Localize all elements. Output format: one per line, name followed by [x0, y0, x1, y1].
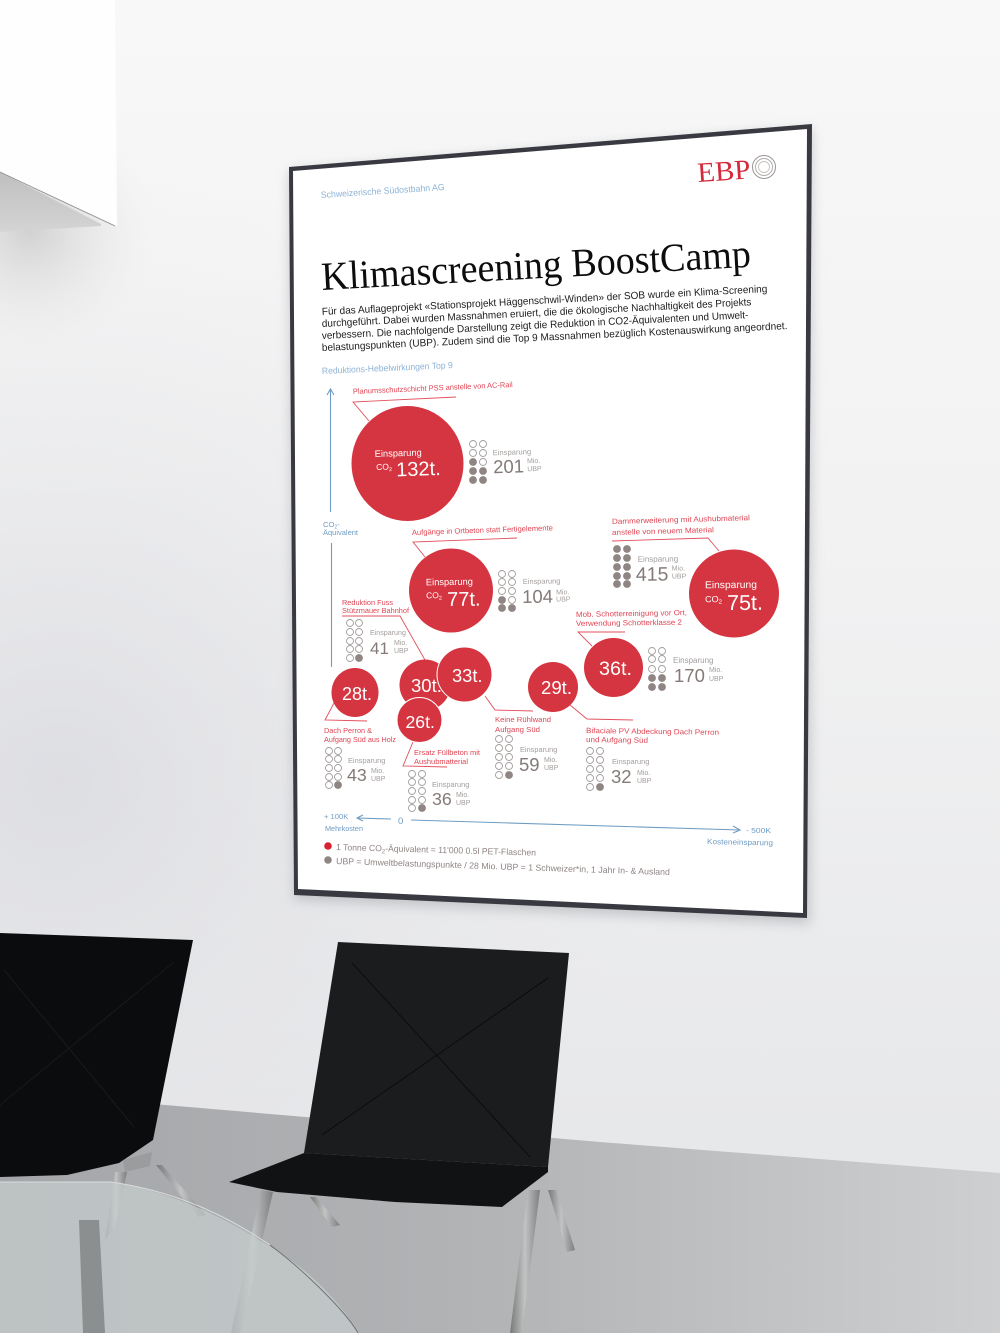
item: 29t circle: 29t. — [541, 677, 572, 698]
x axis: Kosten — [324, 812, 773, 847]
intro text: belastungspunkten (UBP). Zudem sind die Top 9 Massnahmen bezüglich Kostenauswirkung angeordnet. — [322, 321, 788, 354]
item: Bifaciale PV 32 Mio UBP: 32 — [611, 766, 632, 787]
item: Dach Perron 28t: 43 — [347, 765, 367, 785]
item: Dach Perron 28t: Dach Perron & — [324, 726, 372, 735]
item: Dammerweiterung 75t: Einsparung — [638, 554, 678, 564]
chart heading: Reduktions-Hebelwirkungen Top 9 — [322, 360, 453, 376]
room: overhead wall block — [0, 0, 117, 232]
item: Mob. Schotterreinigung 36t: Verwendung Schotterklasse 2 — [576, 618, 682, 628]
item: Dach Perron 28t: 28t. — [342, 684, 372, 704]
item: Keine Rühlwand 33t: Mio. — [544, 757, 557, 764]
x axis: Kosten: - 500K — [746, 826, 771, 835]
item: Planumsschutzschicht 132t: Einsparung — [375, 447, 422, 459]
intro text: verbessern. Die nachfolgende Darstellung zeigt die Reduktion in CO2-Äquivalenten und Umwelt- — [322, 309, 749, 342]
table: glass top and leg — [0, 1182, 358, 1333]
item: Keine Rühlwand 33t: Einsparung — [520, 745, 557, 754]
item: Dammerweiterung 75t: UBP — [672, 573, 687, 581]
item: Planumsschutzschicht 132t: UBP — [527, 466, 542, 473]
item: Mob. Schotterreinigung 36t: Mio. — [709, 667, 722, 674]
item: Ersatz Füllbeton 26t: 26t. — [406, 712, 435, 732]
item: Aufgänge in Ortbeton 77t: Einsparung — [523, 576, 560, 586]
item: Aufgänge in Ortbeton 77t — [409, 523, 571, 632]
item: Planumsschutzschicht 132t: CO — [376, 462, 389, 472]
item: Keine Rühlwand 33t: 59 — [519, 754, 540, 775]
item: Mob. Schotterreinigung 36t: 170 — [674, 665, 705, 686]
item: Reduktion Fuss Stützmauer 30t: 30t. — [411, 675, 442, 696]
item: Aufgänge in Ortbeton 77t: UBP — [556, 596, 571, 604]
item: Keine Rühlwand 33t — [437, 647, 559, 779]
item: Bifaciale PV 32 Mio UBP: Einsparung — [612, 757, 649, 766]
logo: EBP: EBP — [696, 155, 751, 189]
legend — [324, 842, 670, 877]
item: Reduktion Fuss Stützmauer 30t: Reduktion Fuss — [342, 598, 393, 607]
poster panel — [293, 129, 807, 913]
legend: 2 — [382, 849, 386, 855]
item: Bifaciale PV 32 Mio UBP: Bifaciale PV Abdeckung Dach Perron — [586, 726, 719, 737]
item: Planumsschutzschicht 132t — [352, 380, 542, 521]
y axis: CO2-Äquivalent: Äquivalent — [323, 528, 359, 537]
item: Reduktion Fuss Stützmauer 30t: UBP — [394, 648, 409, 655]
item: Reduktion Fuss Stützmauer 30t: Mio. — [394, 640, 407, 647]
item: Planumsschutzschicht 132t: Einsparung — [493, 447, 531, 457]
item: Ersatz Füllbeton 26t — [397, 698, 481, 812]
item: Keine Rühlwand 33t: Aufgang Süd — [495, 725, 540, 734]
item: Reduktion Fuss Stützmauer 30t: Stützmauer Bahnhof — [342, 606, 410, 615]
item: Aufgänge in Ortbeton 77t: Einsparung — [426, 576, 473, 587]
item: Planumsschutzschicht 132t: 132t. — [396, 458, 441, 481]
y axis: CO2-Äquivalent: - — [337, 520, 340, 529]
y axis: CO2-Äquivalent — [323, 389, 359, 667]
chair: right — [229, 942, 569, 1207]
item: Aufgänge in Ortbeton 77t: Aufgänge in Ortbeton statt Fertigelemente — [412, 523, 553, 537]
poster shadow — [289, 128, 812, 924]
item: Mob. Schotterreinigung 36t — [576, 608, 724, 697]
item: Reduktion Fuss Stützmauer 30t — [342, 598, 450, 710]
item: Dammerweiterung 75t: Dammerweiterung mit Aushubmaterial — [612, 513, 750, 526]
item: Ersatz Füllbeton 26t: Mio. — [456, 792, 469, 799]
item: Aufgänge in Ortbeton 77t: 2 — [439, 596, 442, 602]
logo: EBP — [696, 155, 776, 189]
item: Dammerweiterung 75t — [612, 513, 779, 638]
item: Planumsschutzschicht 132t: 2 — [389, 467, 392, 473]
item: Dach Perron 28t — [324, 668, 396, 789]
item: Bifaciale PV 32 Mio UBP: Mio. — [637, 770, 650, 777]
item: Mob. Schotterreinigung 36t: 36t. — [599, 658, 632, 680]
item: Bifaciale PV 32 Mio UBP — [570, 705, 719, 791]
item: Planumsschutzschicht 132t: Mio. — [527, 458, 540, 465]
item: Dammerweiterung 75t: CO — [705, 594, 719, 604]
legend: UBP = Umweltbelastungspunkte / 28 Mio. UBP = 1 Schweizer*in, 1 Jahr In- & Ausland — [336, 856, 670, 877]
item: Dammerweiterung 75t: Einsparung — [705, 580, 757, 591]
item: Dach Perron 28t: Aufgang Süd aus Holz — [324, 735, 396, 744]
item: Aufgänge in Ortbeton 77t: Mio. — [556, 589, 569, 597]
item: Mob. Schotterreinigung 36t: Einsparung — [673, 656, 713, 665]
x axis: Kosten: + 100K — [324, 812, 348, 821]
item: Aufgänge in Ortbeton 77t: 77t. — [447, 589, 481, 611]
item: Keine Rühlwand 33t: UBP — [544, 765, 559, 772]
item: Keine Rühlwand 33t: 33t. — [452, 665, 482, 686]
item: Dach Perron 28t: Mio. — [371, 768, 384, 775]
y axis: CO2-Äquivalent: CO — [323, 520, 334, 529]
item: Reduktion Fuss Stützmauer 30t: 41 — [370, 639, 389, 658]
poster frame — [289, 124, 812, 918]
item: Bifaciale PV 32 Mio UBP: UBP — [637, 778, 652, 785]
x axis: Kosten: 0 — [398, 816, 403, 827]
item: Ersatz Füllbeton 26t: 36 — [432, 789, 452, 809]
item: Bifaciale PV 32 Mio UBP: und Aufgang Süd — [586, 735, 648, 745]
item: Ersatz Füllbeton 26t: Aushubmatterial — [414, 757, 468, 766]
intro text: Für das Auflageprojekt «Stationsprojekt Häggenschwil-Winden» der SOB wurde ein Klima-Screening — [322, 284, 768, 318]
item: Mob. Schotterreinigung 36t: UBP — [709, 676, 724, 683]
header: client name: Schweizerische Südostbahn AG — [320, 182, 445, 200]
item: Ersatz Füllbeton 26t: Ersatz Füllbeton mit — [414, 748, 481, 757]
item: Keine Rühlwand 33t: Keine Rühlwand — [495, 715, 551, 724]
item: Dammerweiterung 75t: 415 — [636, 564, 669, 586]
legend: -Äquivalent = 11'000 0.5l PET-Flaschen — [385, 843, 536, 858]
x axis: Kosten: Mehrkosten — [325, 824, 363, 833]
item: Dammerweiterung 75t: 75t. — [727, 591, 763, 615]
item: Reduktion Fuss Stützmauer 30t: Einsparung — [370, 629, 406, 637]
x axis: Kosten: Kosteneinsparung — [707, 837, 773, 847]
item: Dammerweiterung 75t: Mio. — [672, 565, 685, 573]
item: Ersatz Füllbeton 26t: UBP — [456, 800, 471, 807]
item: Dammerweiterung 75t: 2 — [719, 600, 723, 606]
item: Planumsschutzschicht 132t: 201 — [493, 455, 524, 477]
room: floor — [0, 1091, 1000, 1333]
item: Dach Perron 28t: Einsparung — [348, 756, 385, 765]
title: Klimascreening BoostCamp — [320, 231, 752, 299]
legend: 1 Tonne CO — [336, 842, 383, 853]
item: Dammerweiterung 75t: anstelle von neuem Material — [612, 525, 714, 537]
chair: rear left legs — [105, 1165, 206, 1240]
item: Ersatz Füllbeton 26t: Einsparung — [432, 780, 469, 789]
item: Aufgänge in Ortbeton 77t: 104 — [522, 586, 553, 607]
y axis: CO2-Äquivalent: 2 — [334, 524, 337, 530]
item: Mob. Schotterreinigung 36t: Mob. Schotterreinigung vor Ort, — [576, 608, 687, 619]
chair: right legs — [231, 1190, 575, 1333]
item: Planumsschutzschicht 132t: Planumsschutzschicht PSS anstelle von AC-Rail — [353, 380, 513, 396]
item: Dach Perron 28t: UBP — [371, 776, 386, 783]
item: 29t circle — [528, 662, 578, 712]
intro text — [322, 284, 788, 354]
item: Aufgänge in Ortbeton 77t: CO — [426, 590, 439, 600]
chair: left — [0, 933, 193, 1177]
intro text: durchgeführt. Dabei wurden Massnahmen eruiert, die die ökologische Nachhaltigkeit des Projekts — [322, 297, 752, 330]
